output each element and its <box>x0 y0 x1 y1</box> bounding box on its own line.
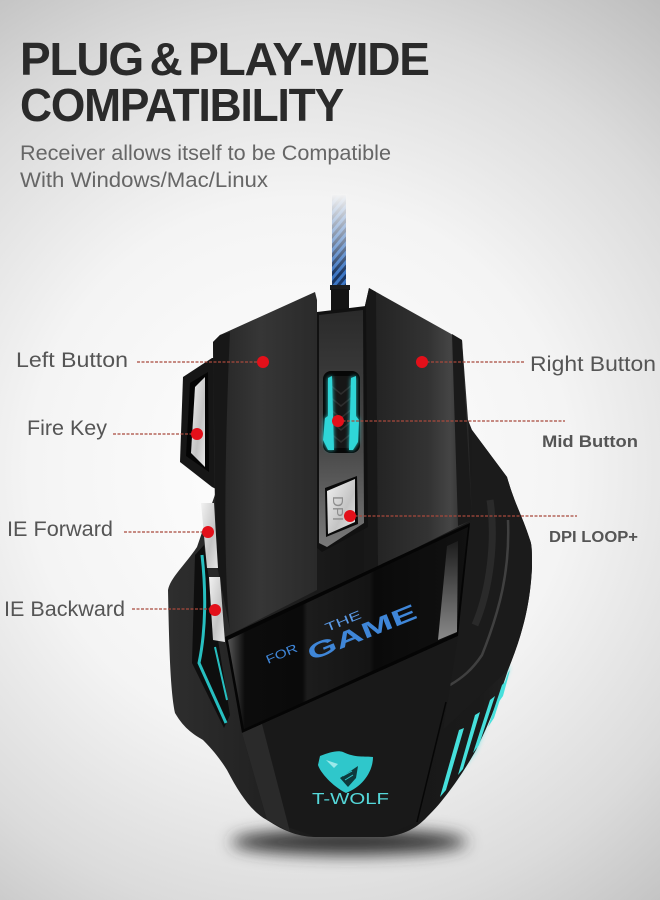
mouse <box>168 288 532 837</box>
palm rest <box>242 636 458 837</box>
wolf logo <box>318 751 373 793</box>
glow behind right stripes <box>440 660 510 798</box>
subtitle: Receiver allows itself to be Compatible <box>20 142 391 165</box>
callout: left button <box>16 349 269 372</box>
callout: mid button <box>332 415 638 451</box>
callout: left button: Left Button <box>16 349 128 372</box>
callout: right button <box>416 353 656 376</box>
callout: DPI loop <box>344 510 638 546</box>
FOR THE GAME lettering: THE <box>323 608 363 635</box>
callout: IE backward <box>4 598 221 621</box>
FOR THE GAME lettering: GAME <box>304 599 420 666</box>
subtitle <box>20 142 391 192</box>
callout: DPI loop: DPI LOOP+ <box>549 529 638 546</box>
fire key <box>186 372 209 472</box>
FOR THE GAME lettering <box>264 599 420 667</box>
left button <box>213 292 317 637</box>
game band <box>225 523 470 733</box>
callout: IE backward: IE Backward <box>4 598 125 621</box>
DPI button: DPI <box>329 496 346 521</box>
center strip <box>317 306 368 552</box>
mouse shadow <box>231 829 467 855</box>
scroll wheel <box>323 371 360 453</box>
title: PLUG & PLAY-WIDE <box>20 33 429 85</box>
cable <box>330 194 350 315</box>
side button channel <box>192 545 230 728</box>
subtitle: With Windows/Mac/Linux <box>20 169 269 192</box>
IE forward button <box>201 503 218 568</box>
callout: right button: Right Button <box>530 353 656 376</box>
callout: IE forward <box>7 518 214 541</box>
DPI button <box>325 476 358 537</box>
right cyan light stripes <box>440 670 510 797</box>
FOR THE GAME lettering: FOR <box>264 641 300 667</box>
title: COMPATIBILITY <box>20 79 343 131</box>
callout: IE forward: IE Forward <box>7 518 113 541</box>
callout: mid button: Mid Button <box>542 432 638 451</box>
title <box>20 33 429 131</box>
left thumb panel <box>180 358 222 492</box>
IE backward button <box>209 577 225 642</box>
right button <box>364 288 472 574</box>
callout: fire key: Fire Key <box>27 417 108 440</box>
T-WOLF wordmark: T-WOLF <box>312 791 389 808</box>
right side grip <box>443 430 532 730</box>
band side highlight <box>438 541 458 640</box>
left cyan light strips <box>199 555 227 723</box>
callout: fire key <box>27 417 203 440</box>
mouse body <box>168 400 532 837</box>
